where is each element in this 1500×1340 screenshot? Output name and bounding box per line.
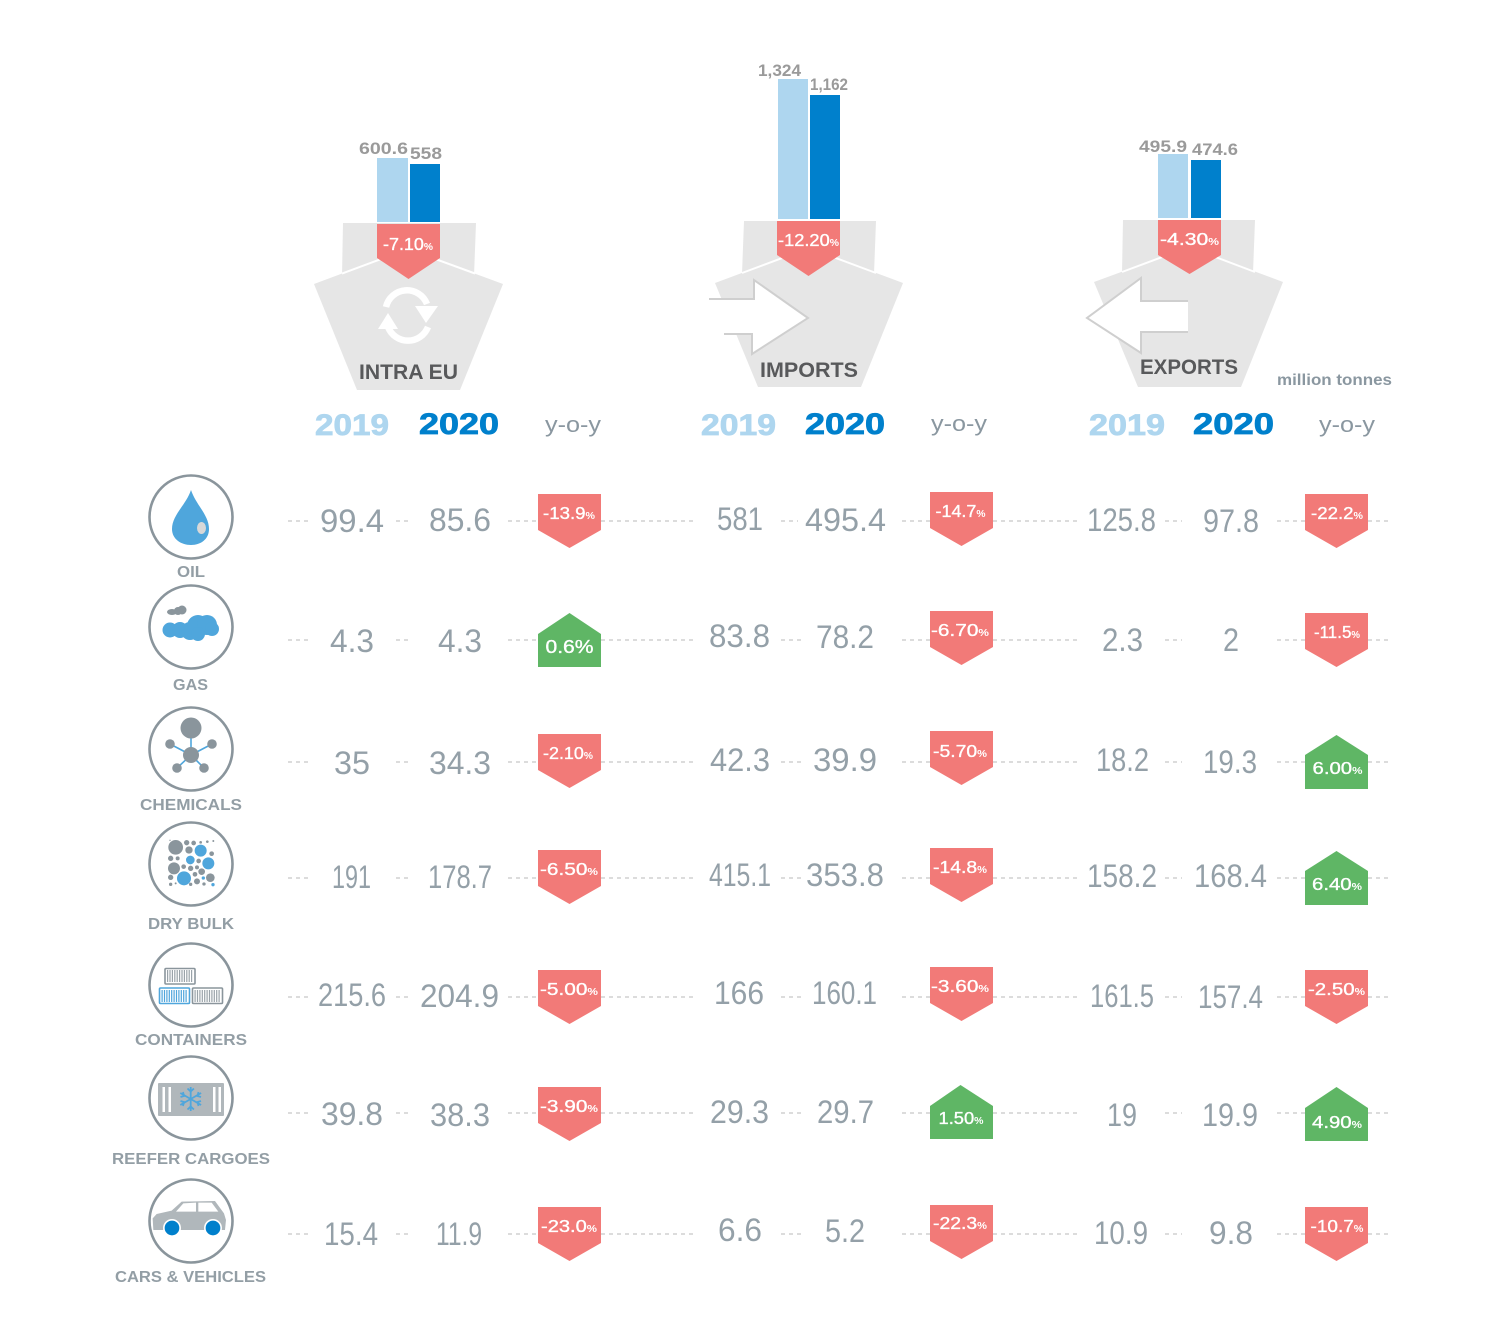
change arrow: dry bulk exports (1305, 851, 1368, 905)
change arrow: containers exports (1305, 970, 1368, 1024)
change arrow: cars exports (1305, 1207, 1368, 1261)
column headers: intra EU: y-o-y (545, 412, 601, 437)
change arrow: oil intra EU: -13.9 % (543, 503, 595, 523)
bar: imports 2020 (810, 95, 840, 219)
change arrow: gas intra EU: 0.6% (546, 637, 594, 657)
label: chemicals: CHEMICALS (140, 797, 242, 814)
change arrow: reefer intra EU (538, 1087, 601, 1141)
icon: containers (150, 944, 232, 1026)
change arrow: exports: -4.30 % (1160, 229, 1219, 249)
row: containers (135, 944, 1392, 1049)
change arrow: intra EU (377, 224, 440, 279)
values: gas: 2.3 (1102, 622, 1143, 658)
values: dry bulk: 168.4 (1194, 858, 1267, 894)
values: reefer cargoes: 29.3 (710, 1094, 769, 1130)
change arrow: dry bulk intra EU: -6.50 % (540, 859, 598, 879)
ship hull: intra EU (314, 223, 503, 390)
icon: oil drop (150, 476, 232, 558)
change arrow: cars intra EU (538, 1207, 601, 1261)
values: dry bulk: 178.7 (428, 859, 492, 895)
change arrow: gas exports: -11.5% (1314, 622, 1360, 642)
column headers: imports (701, 408, 987, 442)
icon: molecule (150, 708, 232, 790)
bar: exports 2020 (1191, 160, 1221, 218)
change arrow: dry bulk exports: 6.40 % (1312, 874, 1362, 894)
change arrow: intra EU: -7.10% (383, 234, 433, 254)
change arrow: reefer exports (1305, 1087, 1368, 1141)
values: dry bulk: 191 (332, 859, 371, 895)
values: chemicals: 34.3 (429, 745, 491, 781)
change arrow: containers imports: -3.60 % (931, 976, 989, 996)
column headers: intra EU: 2020 (419, 408, 499, 441)
label: gas: GAS (173, 677, 208, 694)
values: gas: 83.8 (709, 618, 770, 654)
change arrow: chemicals intra EU (538, 734, 601, 788)
change arrow: oil exports: -22.2 % (1311, 503, 1363, 523)
values: chemicals: 42.3 (710, 742, 770, 778)
change arrow: imports (777, 221, 840, 276)
change arrow: exports (1158, 220, 1221, 274)
change arrow: chemicals intra EU: -2.10% (543, 743, 593, 763)
bar value: intra EU 2019: 600.6 (359, 139, 408, 158)
change arrow: gas imports: -6.70 % (931, 620, 989, 640)
icon: inward arrow (709, 280, 808, 354)
column headers: exports: 2019 (1089, 409, 1165, 442)
values: containers: 215.6 (318, 977, 386, 1013)
column headers: intra EU (315, 408, 601, 442)
label: reefer cargoes: REEFER CARGOES (112, 1151, 270, 1168)
row: gas (150, 586, 1392, 694)
change arrow: dry bulk imports (930, 848, 993, 902)
values: cars and vehicles: 9.8 (1209, 1215, 1253, 1251)
change arrow: oil imports (930, 492, 993, 546)
column headers: exports: y-o-y (1319, 412, 1375, 437)
values: containers: 166 (714, 975, 764, 1011)
change arrow: chemicals imports (930, 731, 993, 785)
change arrow: cars intra EU: -23.0 % (541, 1216, 597, 1236)
change arrow: chemicals exports (1305, 735, 1368, 789)
panel: intra EU ship (314, 139, 503, 390)
change arrow: chemicals exports: 6.00 % (1312, 758, 1363, 778)
values: reefer cargoes: 19.9 (1202, 1097, 1258, 1133)
column headers: intra EU: 2019 (315, 409, 389, 442)
change arrow: containers intra EU: -5.00 % (540, 979, 598, 999)
change arrow: cars exports: -10.7 % (1310, 1216, 1364, 1236)
icon: dry bulk particles (150, 822, 232, 906)
panel: imports ship (709, 61, 903, 387)
values: oil: 85.6 (429, 502, 491, 538)
change arrow: oil intra EU (538, 494, 601, 548)
values: dry bulk (332, 857, 1267, 895)
change arrow: dry bulk intra EU (538, 850, 601, 904)
change arrow: cars imports: -22.3 % (933, 1213, 987, 1233)
values: chemicals: 35 (334, 745, 370, 781)
change arrow: reefer imports: 1.50% (938, 1108, 984, 1128)
row: chemicals (140, 708, 1392, 814)
row: cars and vehicles (115, 1180, 1392, 1286)
values: gas: 4.3 (330, 623, 374, 659)
icon: gas cloud (150, 586, 232, 668)
icon: reefer container (150, 1056, 232, 1140)
values: reefer cargoes (321, 1094, 1258, 1133)
values: oil (320, 501, 1259, 539)
values: dry bulk: 353.8 (806, 857, 884, 893)
values: dry bulk: 415.1 (709, 857, 771, 893)
values: gas (330, 618, 1239, 659)
values: chemicals: 39.9 (813, 742, 877, 778)
values: cars and vehicles: 10.9 (1094, 1215, 1148, 1251)
values: containers: 204.9 (420, 978, 499, 1014)
values: cars and vehicles: 15.4 (324, 1216, 378, 1252)
values: containers: 160.1 (812, 975, 877, 1011)
row: reefer cargoes (112, 1056, 1392, 1168)
bar value: imports 2020: 1,162 (810, 75, 848, 94)
ship label: imports: IMPORTS (760, 359, 858, 382)
values: dry bulk: 158.2 (1087, 858, 1157, 894)
change arrow: gas intra EU (538, 613, 601, 667)
bar: exports 2019 (1158, 154, 1188, 218)
bar value: imports 2019: 1,324 (758, 61, 802, 80)
icon: outward arrow (1087, 278, 1188, 353)
label: containers: CONTAINERS (135, 1032, 247, 1049)
values: gas: 4.3 (438, 623, 482, 659)
change arrow: oil imports: -14.7% (936, 501, 986, 521)
change arrow: imports: -12.20% (778, 230, 839, 250)
values: reefer cargoes: 38.3 (430, 1097, 490, 1133)
column headers: exports: 2020 (1193, 408, 1274, 441)
change arrow: containers imports (930, 967, 993, 1021)
row: oil (150, 476, 1392, 581)
ship hull: imports (715, 221, 903, 387)
values: containers: 157.4 (1198, 979, 1263, 1015)
values: cars and vehicles: 6.6 (718, 1212, 762, 1248)
values: reefer cargoes: 39.8 (321, 1096, 383, 1132)
bar: intra EU 2020 (410, 164, 440, 222)
ship label: exports: EXPORTS (1140, 356, 1238, 379)
panel: exports ship (1087, 137, 1283, 387)
column headers: imports: 2020 (805, 408, 885, 441)
values: cars and vehicles: 5.2 (825, 1213, 865, 1249)
values: oil: 495.4 (805, 502, 886, 538)
values: reefer cargoes: 29.7 (817, 1094, 874, 1130)
values: cars and vehicles: 11.9 (436, 1216, 482, 1252)
values: oil: 125.8 (1087, 502, 1156, 538)
change arrow: dry bulk imports: -14.8 % (933, 857, 987, 877)
values: containers (318, 975, 1263, 1015)
bar value: intra EU 2020: 558 (410, 144, 442, 163)
change arrow: oil exports (1305, 494, 1368, 548)
label: oil: OIL (177, 564, 205, 581)
change arrow: chemicals imports: -5.70 % (933, 741, 987, 761)
change arrow: reefer intra EU: -3.90 % (540, 1096, 598, 1116)
label: dry bulk: DRY BULK (148, 916, 234, 933)
values: oil: 581 (717, 501, 763, 537)
unit note: million tonnes (1277, 372, 1392, 389)
bar value: exports 2019: 495.9 (1139, 137, 1187, 156)
values: oil: 99.4 (320, 503, 384, 539)
column headers: imports: y-o-y (931, 411, 987, 436)
icon: circular arrows (378, 290, 438, 341)
change arrow: cars imports (930, 1205, 993, 1259)
change arrow: containers exports: -2.50 % (1308, 979, 1365, 999)
change arrow: reefer imports (930, 1085, 993, 1139)
values: chemicals (334, 742, 1257, 781)
values: containers: 161.5 (1090, 978, 1154, 1014)
values: oil: 97.8 (1203, 503, 1259, 539)
values: gas: 2 (1223, 622, 1239, 658)
change arrow: containers intra EU (538, 970, 601, 1024)
change arrow: gas imports (930, 611, 993, 665)
values: cars and vehicles (324, 1212, 1253, 1252)
icon: car (150, 1180, 232, 1262)
values: reefer cargoes: 19 (1107, 1097, 1137, 1133)
label: cars and vehicles: CARS & VEHICLES (115, 1269, 266, 1286)
values: gas: 78.2 (816, 619, 874, 655)
row: dry bulk (148, 822, 1392, 933)
values: chemicals: 19.3 (1203, 744, 1257, 780)
change arrow: reefer exports: 4.90 % (1312, 1112, 1362, 1132)
ship hull: exports (1094, 220, 1283, 387)
values: chemicals: 18.2 (1096, 742, 1149, 778)
column headers: exports (1089, 408, 1375, 442)
bar: imports 2019 (778, 79, 808, 219)
ship label: intra EU: INTRA EU (359, 361, 458, 384)
bar value: exports 2020: 474.6 (1192, 140, 1238, 159)
column headers: imports: 2019 (701, 409, 776, 442)
change arrow: gas exports (1305, 613, 1368, 667)
bar: intra EU 2019 (377, 158, 408, 222)
